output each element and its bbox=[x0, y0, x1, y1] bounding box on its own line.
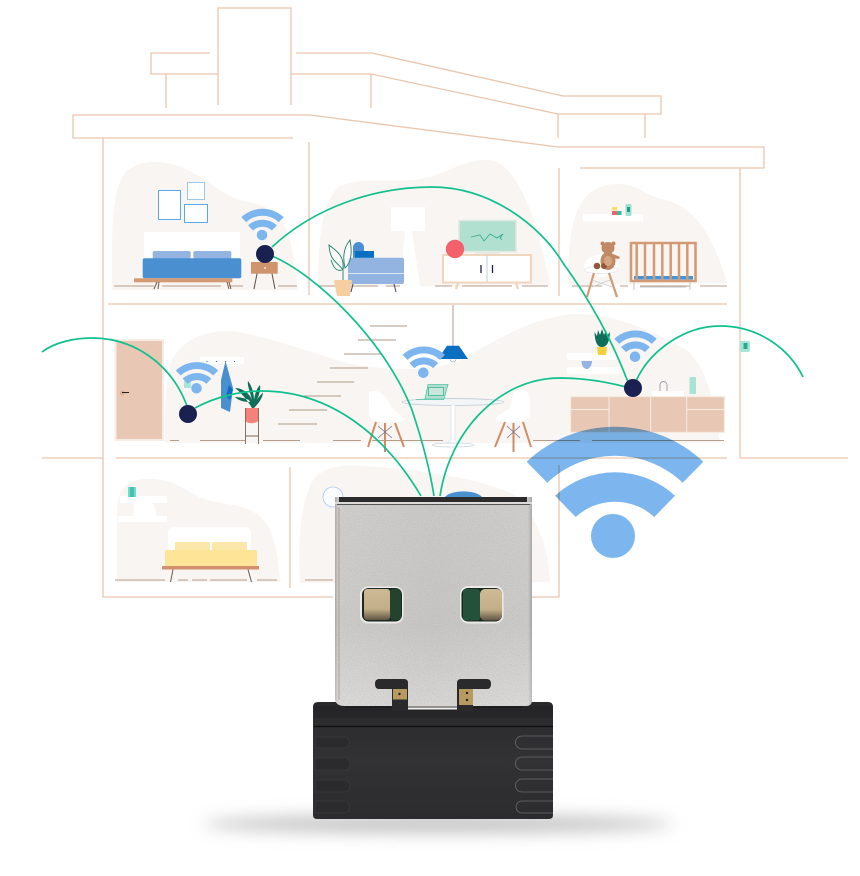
wall clock bbox=[323, 487, 343, 507]
wifi icon: kitchen bbox=[614, 330, 657, 362]
stool bbox=[584, 255, 618, 297]
USB adapter bbox=[313, 497, 553, 819]
room backdrop shapes bbox=[112, 160, 727, 583]
room: living room upstairs bbox=[329, 207, 531, 296]
nightstand bbox=[251, 262, 278, 289]
coat rack bbox=[200, 357, 244, 364]
shelves bbox=[118, 487, 167, 522]
wifi icon: hallway bbox=[176, 362, 218, 394]
room: nursery bbox=[583, 204, 696, 297]
room: downstairs bedroom bbox=[118, 487, 259, 582]
chair right bbox=[495, 390, 531, 452]
staircase bbox=[278, 326, 407, 424]
house outline bbox=[42, 8, 848, 597]
connection arcs bbox=[42, 187, 803, 496]
adapter shadow bbox=[203, 815, 673, 833]
grip ridges left bbox=[315, 737, 350, 813]
network nodes bbox=[179, 245, 642, 423]
teddy bear bbox=[594, 242, 620, 270]
wall shelf bbox=[583, 204, 643, 222]
round table bbox=[402, 398, 504, 447]
sofa bbox=[348, 242, 404, 292]
media cabinet bbox=[443, 255, 531, 289]
black plastic body bbox=[313, 702, 553, 819]
floor lines bbox=[114, 286, 727, 580]
small device bbox=[184, 381, 191, 388]
shelves bbox=[567, 353, 620, 374]
floor lamp bbox=[391, 207, 425, 286]
teal device outside bbox=[740, 341, 750, 352]
bed bbox=[134, 232, 241, 289]
blue towel bbox=[221, 361, 233, 412]
yellow bed bbox=[162, 527, 259, 582]
room: hallway bbox=[116, 326, 407, 444]
wifi icon: bedroom bbox=[241, 209, 284, 240]
leafy plant on stand bbox=[235, 381, 263, 444]
grip ridges right bbox=[516, 736, 553, 813]
wifi icon: dining bbox=[403, 346, 445, 378]
crib bbox=[631, 243, 696, 290]
room: dining bbox=[368, 305, 531, 452]
left contact window bbox=[360, 586, 404, 624]
right contact window bbox=[460, 586, 504, 624]
room: bedroom upstairs bbox=[134, 182, 278, 289]
chair left bbox=[368, 391, 404, 452]
room: kitchen bbox=[567, 329, 725, 432]
right notch with gold pad bbox=[457, 679, 491, 711]
metal connector bbox=[335, 497, 532, 711]
television bbox=[459, 220, 516, 254]
left notch with gold pad bbox=[375, 679, 408, 711]
red ball bbox=[446, 240, 464, 258]
laptop bbox=[416, 384, 448, 400]
potted plant bbox=[329, 240, 352, 296]
faucet bbox=[660, 382, 667, 391]
large wifi symbol bbox=[527, 427, 703, 558]
door bbox=[116, 340, 163, 440]
smart speaker bbox=[690, 377, 696, 394]
pendant lamp bbox=[438, 305, 468, 362]
blue object behind adapter bbox=[445, 491, 482, 497]
counter cabinets bbox=[570, 391, 725, 432]
picture frames bbox=[158, 182, 208, 222]
potted cactus bbox=[594, 329, 610, 355]
